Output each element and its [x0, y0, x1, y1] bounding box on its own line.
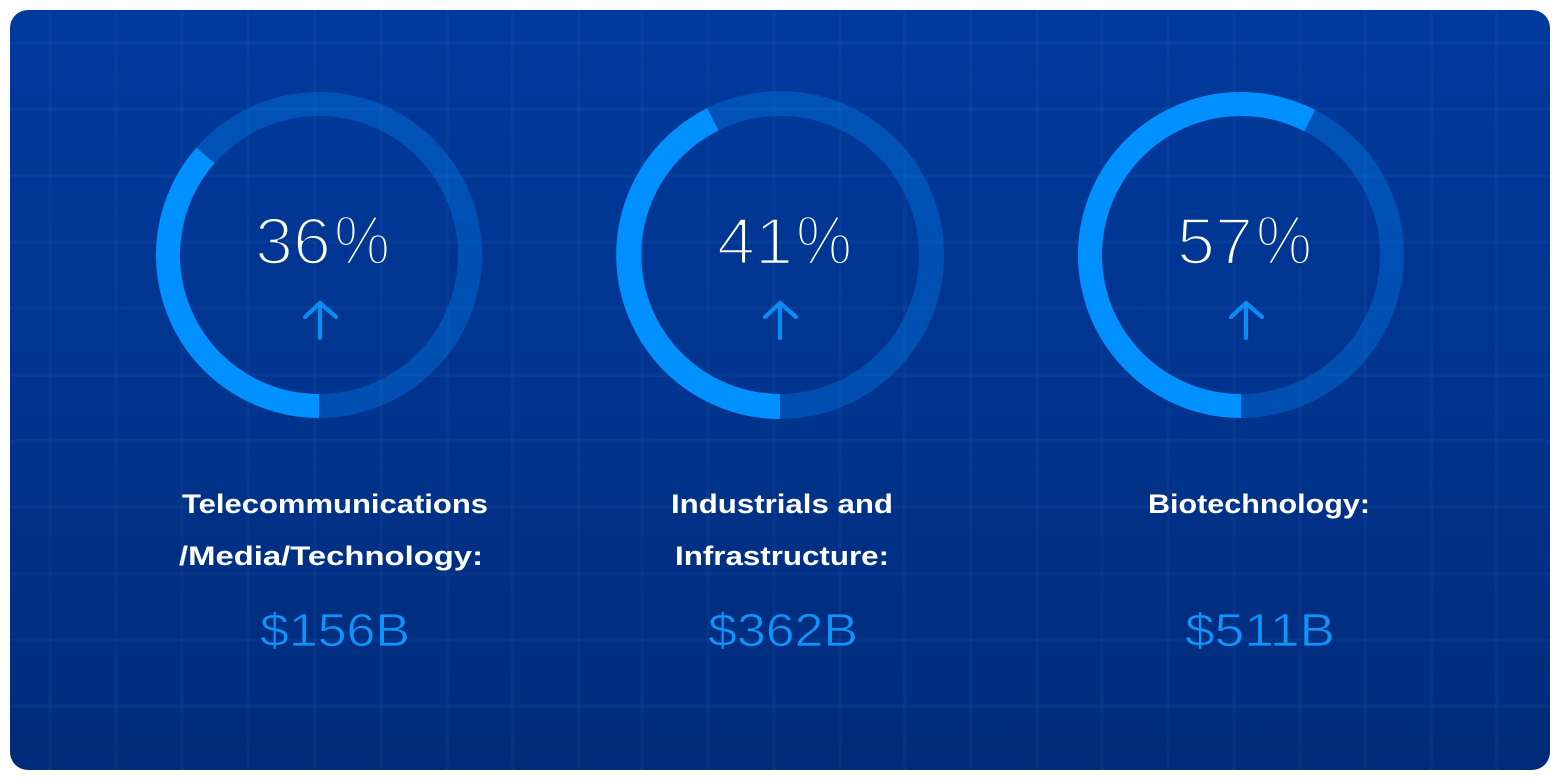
percentage: 41%: 41 [717, 204, 793, 278]
label: Telecommunications/Media/Technology: /Media/Technology: [179, 541, 483, 571]
percentage: 41%: % [796, 201, 852, 279]
value: $362B: $362B [708, 604, 858, 656]
panel: industrials metric [628, 104, 932, 656]
donut chart: 36% [168, 104, 470, 406]
icon: up arrow [1231, 303, 1262, 338]
donut chart: 57% [1090, 104, 1392, 406]
label: Industrials and Infrastructure: Infrastructure: [675, 541, 889, 571]
donut chart: 41% [628, 104, 932, 406]
icon: up arrow [765, 303, 796, 338]
panel: telecommunications metric [168, 104, 488, 656]
label: Biotechnology: Biotechnology: [1148, 489, 1370, 519]
panel: biotechnology metric [1090, 104, 1392, 656]
label: Telecommunications/Media/Technology [179, 489, 488, 571]
value: $511B: $511B [1185, 604, 1335, 656]
label: Industrials and Infrastructure: Industrials and [671, 489, 893, 519]
percentage: 36%: 36 [255, 204, 331, 278]
percentage: 57%: 57 [1177, 204, 1253, 278]
label: Telecommunications/Media/Technology: Telecommunications [182, 489, 488, 519]
icon: up arrow [305, 303, 336, 338]
value: $156B: $156B [260, 604, 410, 656]
percentage: 57%: % [1256, 201, 1312, 279]
label: Industrials and Infrastructure [671, 489, 893, 571]
percentage: 36%: % [334, 201, 390, 279]
